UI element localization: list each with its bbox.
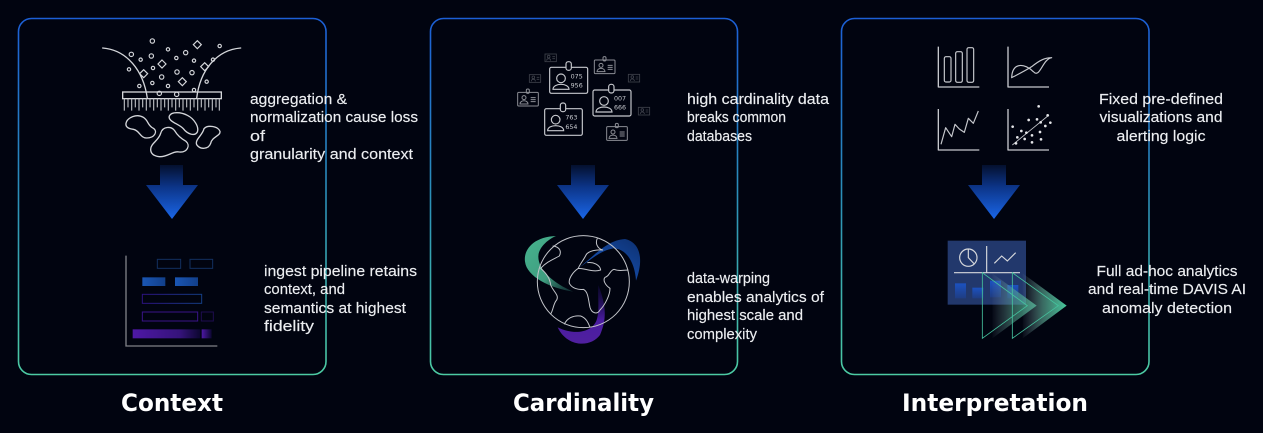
cardinality panel border [430, 18, 738, 374]
icon: globe with swooshes [525, 236, 640, 344]
mid badges [518, 57, 627, 140]
icon: four chart types [938, 47, 1052, 150]
large badge 763 654: 763 [565, 114, 577, 121]
text: high cardinality: high cardinality data [687, 91, 830, 108]
arrow: cardinality down [557, 165, 609, 219]
text: aggregation loses context: granularity and context [250, 146, 414, 163]
large badge 007 666: 007 [614, 96, 626, 103]
large badge 763 654 [545, 103, 582, 135]
text: data-warping: highest scale and [687, 307, 803, 324]
icon: filter funnel with particles [103, 39, 241, 157]
large badge 075 956: 075 [571, 73, 583, 80]
panel: cardinality [430, 18, 830, 374]
text: ad-hoc analytics: and real-time DAVIS AI [1088, 281, 1246, 298]
text: ad-hoc analytics: anomaly detection [1102, 300, 1232, 317]
icon: dashboard with forward chevrons [948, 241, 1067, 338]
large badge 075 956 [550, 62, 588, 93]
panel: context [18, 18, 418, 374]
large badge 007 666 [593, 84, 631, 116]
text: data-warping: data-warping [687, 270, 770, 287]
heading: cardinality: Cardinality [513, 389, 654, 417]
arrow: interpretation down [968, 165, 1020, 219]
panel: interpretation [842, 18, 1246, 374]
faint tiny badges [529, 54, 650, 115]
arrow: context down [146, 165, 198, 219]
text: high cardinality [687, 91, 830, 145]
text: ad-hoc analytics [1088, 263, 1246, 317]
text: ingest pipeline: fidelity [264, 318, 315, 335]
text: aggregation loses context: of [250, 128, 266, 145]
heading: context: Context [121, 389, 223, 417]
chart: ingest pipeline bars [126, 256, 217, 346]
large badge 007 666: 666 [614, 105, 626, 112]
text: high cardinality: breaks common [687, 109, 786, 126]
text: fixed visualizations [1099, 91, 1223, 145]
text: ingest pipeline: ingest pipeline retains [264, 263, 417, 280]
large badge 763 654: 654 [565, 124, 577, 131]
text: high cardinality: databases [687, 128, 752, 145]
text: ingest pipeline [264, 263, 417, 335]
text: data-warping: complexity [687, 326, 757, 343]
text: data-warping: enables analytics of [687, 289, 825, 306]
text: aggregation loses context: normalization cause loss [250, 109, 418, 126]
interpretation panel border [842, 18, 1149, 374]
text: aggregation loses context [250, 91, 418, 163]
large badge 075 956: 956 [571, 82, 583, 89]
text: fixed visualizations: visualizations and [1100, 109, 1222, 126]
text: ingest pipeline: context, and [264, 281, 345, 298]
text: aggregation loses context: aggregation & [250, 91, 347, 108]
text: ingest pipeline: semantics at highest [264, 300, 407, 317]
text: fixed visualizations: alerting logic [1116, 128, 1206, 145]
text: data-warping [687, 270, 825, 343]
heading: interpretation: Interpretation [902, 389, 1088, 417]
icon: ID badges [518, 54, 650, 140]
text: ad-hoc analytics: Full ad-hoc analytics [1096, 263, 1238, 280]
text: fixed visualizations: Fixed pre-defined [1099, 91, 1223, 108]
context panel border [18, 18, 326, 374]
